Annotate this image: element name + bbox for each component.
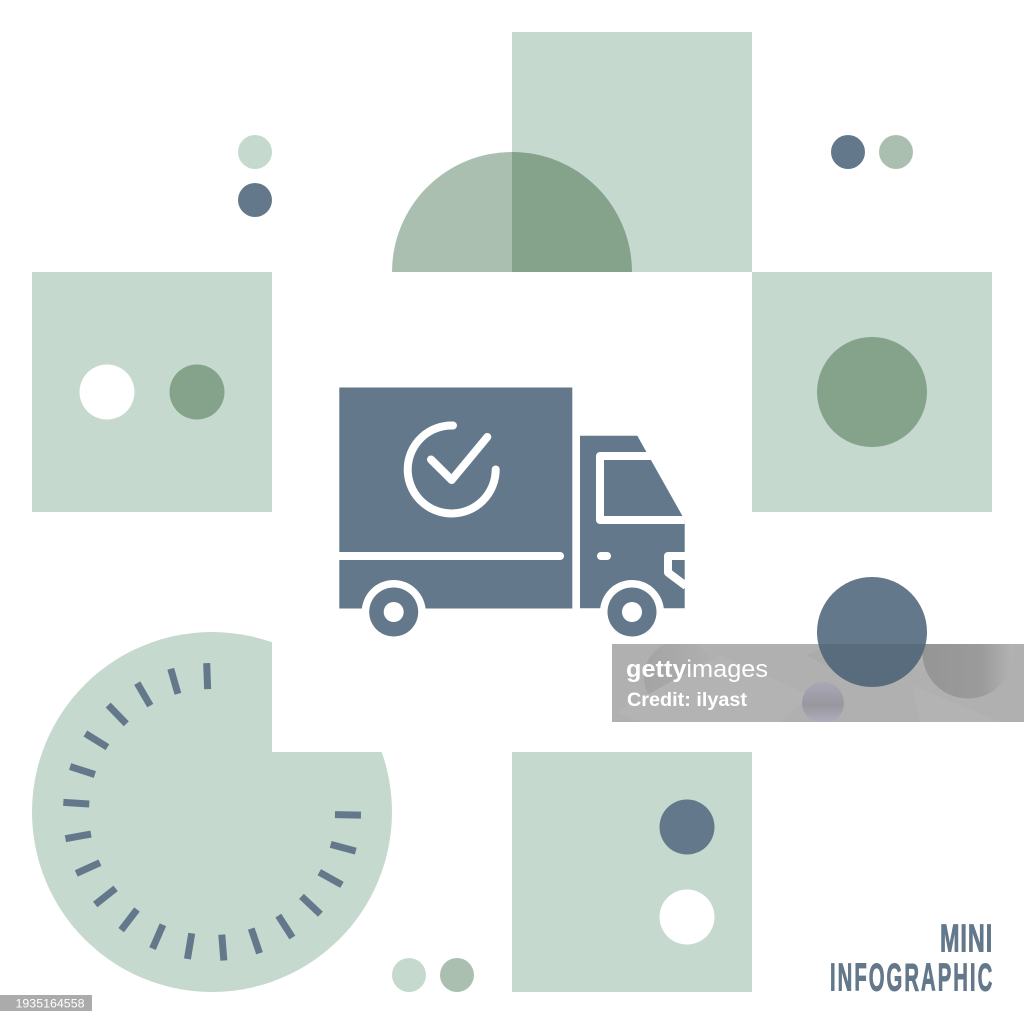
watermark brand text: gettyimages xyxy=(626,656,768,683)
front wheel xyxy=(600,580,664,644)
check circle xyxy=(408,425,496,513)
truck cargo box xyxy=(339,388,572,608)
cab window xyxy=(600,456,685,520)
cargo stripe xyxy=(335,552,560,560)
image id tag xyxy=(0,995,92,1011)
panel: left square with two circles xyxy=(32,272,272,512)
clock ticks xyxy=(63,663,361,961)
dots: top left pair xyxy=(238,135,272,217)
title: MINI xyxy=(940,916,992,960)
headlight xyxy=(601,552,607,560)
panel: clock circle with notch xyxy=(32,632,392,992)
watermark band xyxy=(612,644,1024,722)
image id tag: 1935164558 xyxy=(16,996,85,1010)
dots: bottom pair xyxy=(392,958,474,992)
panel: bottom square with two circles xyxy=(512,752,752,992)
bumper xyxy=(668,556,686,586)
truck cab xyxy=(580,436,685,608)
title xyxy=(830,916,992,999)
icon: delivery truck with check mark xyxy=(335,388,686,644)
panel: right square with circle xyxy=(752,272,992,512)
rear wheel xyxy=(362,580,426,644)
circle: slate right xyxy=(817,577,927,687)
panel: top square with semicircle xyxy=(392,32,752,272)
check mark xyxy=(431,437,487,480)
dots: top right pair xyxy=(831,135,913,169)
title: INFOGRAPHIC xyxy=(830,955,992,999)
watermark credit text: Credit: ilyast xyxy=(627,690,748,711)
